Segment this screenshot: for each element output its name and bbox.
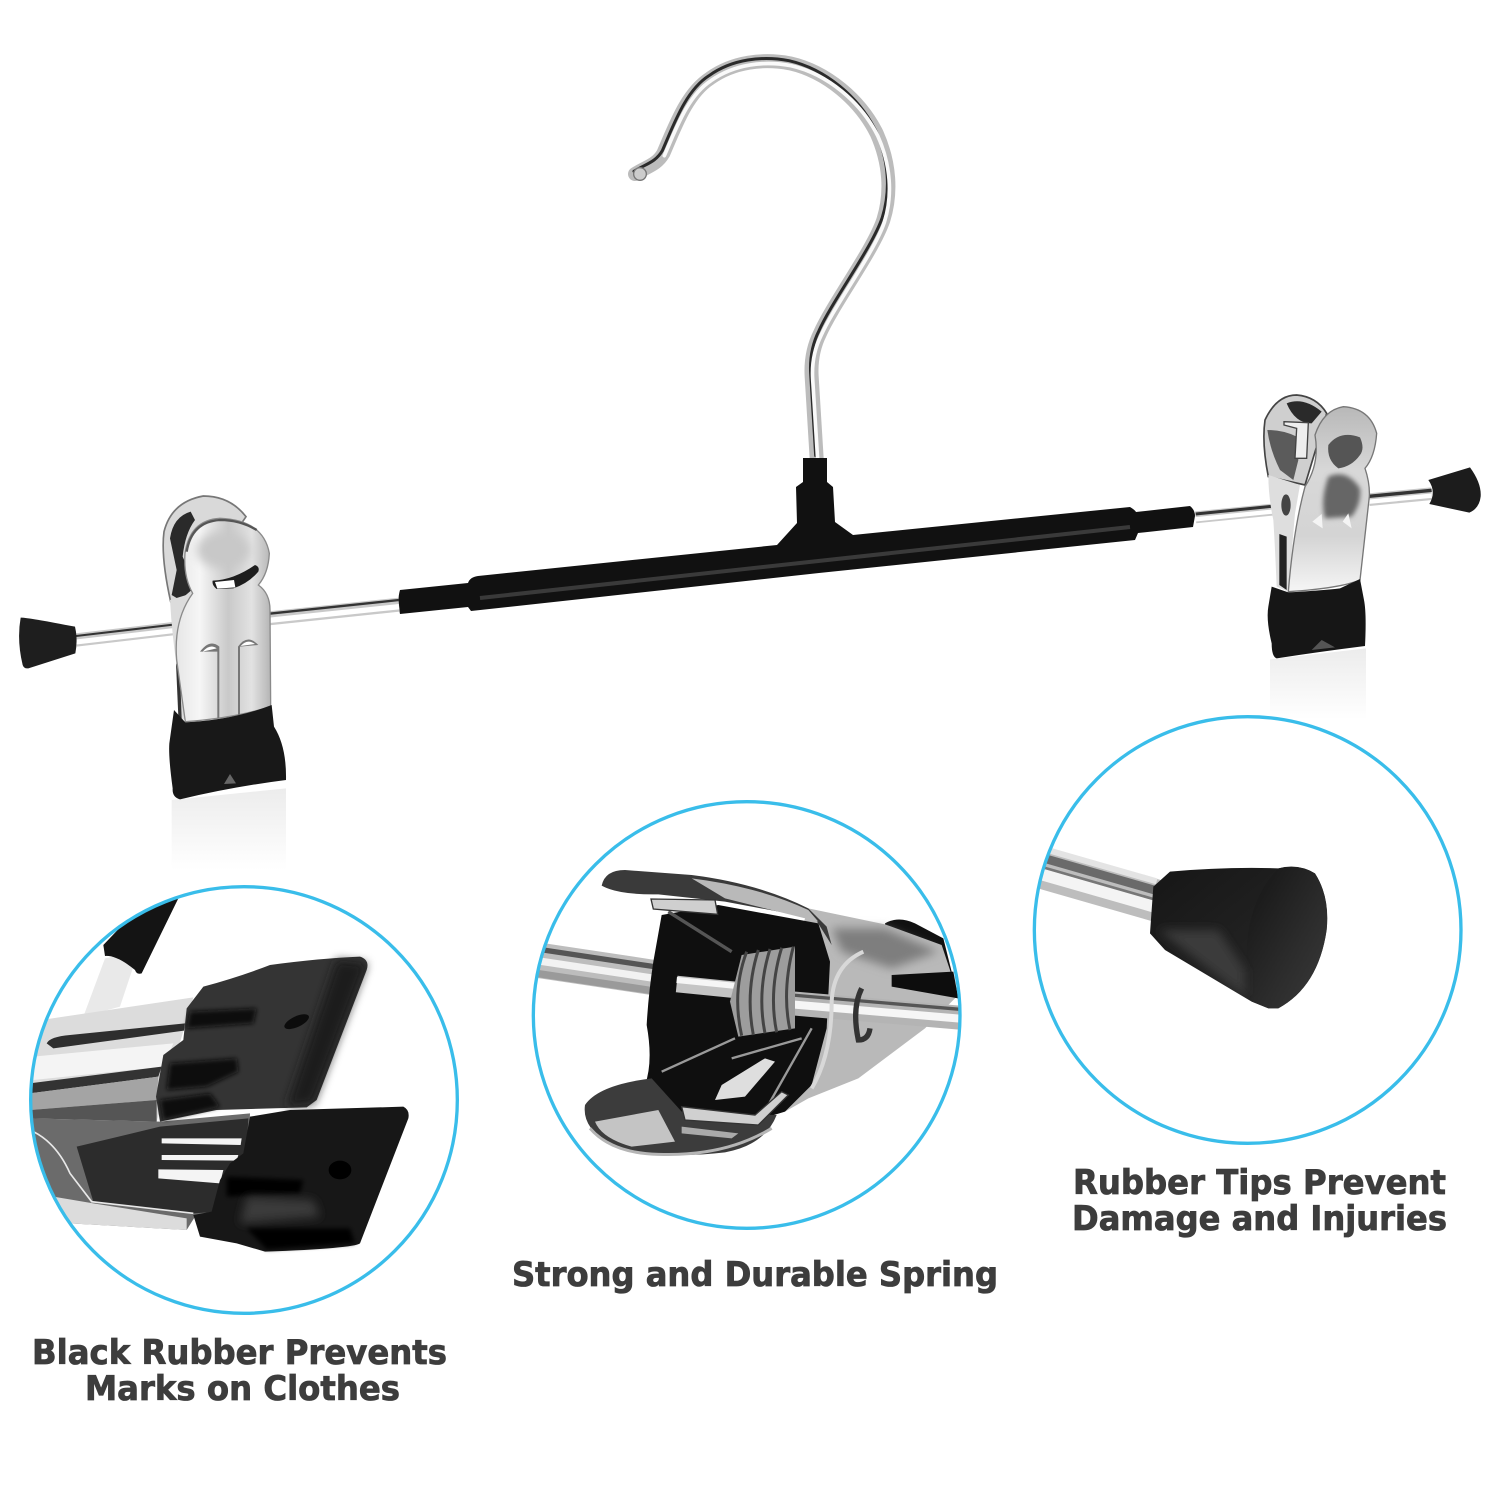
lower rubber tip xyxy=(193,1107,409,1252)
circle outline xyxy=(31,887,457,1313)
caption: black rubber: Black Rubber Prevents xyxy=(32,1333,447,1373)
bar stub xyxy=(103,898,178,974)
right clip floor reflection xyxy=(1270,648,1366,720)
left rod xyxy=(76,600,399,642)
right clip front plate xyxy=(1288,407,1377,592)
left clip back plate xyxy=(163,496,246,602)
right rod xyxy=(1196,490,1432,519)
left clip xyxy=(19,496,399,870)
right clip back plate xyxy=(1264,395,1327,485)
left clip floor reflection xyxy=(172,788,286,870)
left clip front plate xyxy=(176,518,271,722)
rod hole xyxy=(856,988,870,1040)
upper jaw metal xyxy=(30,997,193,1122)
rod xyxy=(1038,847,1157,907)
caption: rubber tips: Rubber Tips Prevent xyxy=(1073,1163,1446,1203)
caption: black rubber: Marks on Clothes xyxy=(85,1369,400,1409)
spring coil xyxy=(730,947,795,1037)
lower jaw metal xyxy=(30,1113,250,1230)
inner rod xyxy=(677,980,960,1019)
right clip xyxy=(1196,395,1481,720)
lower lip xyxy=(585,1078,777,1155)
right clip rubber tip xyxy=(1268,579,1366,658)
panel: black rubber close-up xyxy=(30,887,457,1313)
left clip rubber tip xyxy=(169,705,286,799)
black rubber behind xyxy=(885,919,958,998)
clip body xyxy=(785,908,957,1112)
central crossbar xyxy=(398,458,1195,614)
rod behind clip xyxy=(537,949,654,991)
hanger xyxy=(19,59,1481,870)
upper rod stub xyxy=(84,957,132,1014)
right end cap xyxy=(1428,467,1481,513)
upper rubber tip xyxy=(156,957,367,1122)
left clip window xyxy=(212,565,259,589)
panel: spring close-up xyxy=(533,802,960,1228)
rubber cap xyxy=(1150,867,1327,1008)
caption: black rubber xyxy=(32,1333,447,1409)
left end cap xyxy=(19,618,77,668)
interior xyxy=(646,905,830,1115)
upper lip xyxy=(602,870,832,945)
circle outline xyxy=(1034,717,1461,1143)
caption: rubber tips xyxy=(1072,1163,1447,1239)
circle outline xyxy=(533,802,960,1228)
panel: rubber tip close-up xyxy=(1034,717,1461,1143)
hook xyxy=(634,59,889,460)
bottom pin xyxy=(682,1092,788,1125)
caption: rubber tips: Damage and Injuries xyxy=(1072,1199,1447,1239)
top pin xyxy=(651,899,718,914)
right clip rivets xyxy=(1312,513,1352,528)
left clip slots xyxy=(200,643,219,718)
caption: spring: Strong and Durable Spring xyxy=(512,1255,998,1295)
wire spring arm xyxy=(812,952,863,1088)
